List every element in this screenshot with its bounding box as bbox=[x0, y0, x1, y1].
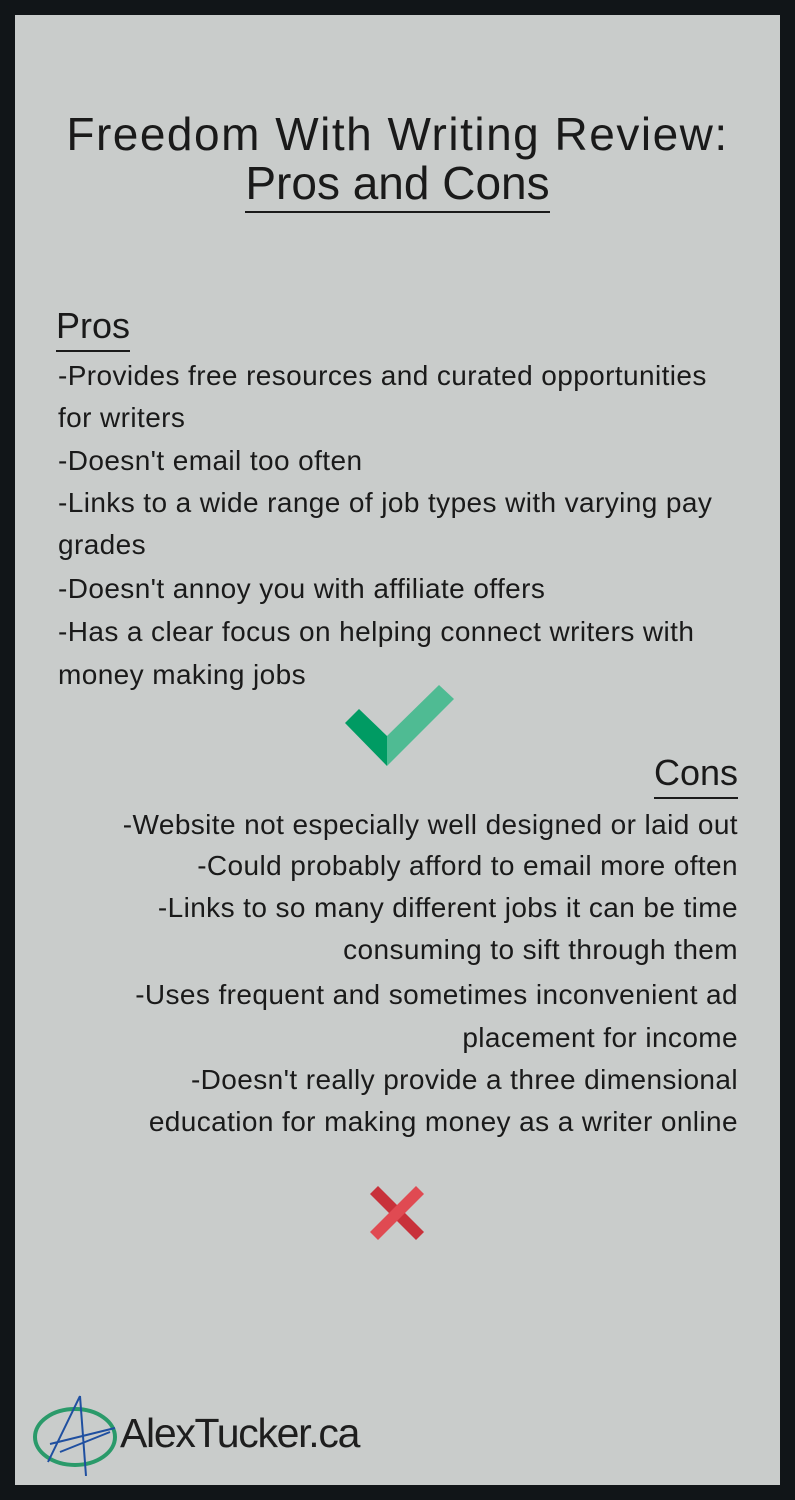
text block: cons list bbox=[123, 809, 738, 1137]
text block: pros list: money making jobs bbox=[58, 659, 306, 690]
text block: cons list: placement for income bbox=[462, 1022, 738, 1053]
text block: pros list: -Links to a wide range of job types with varying pay bbox=[58, 487, 712, 518]
text block: cons list: education for making money as a writer online bbox=[149, 1106, 738, 1137]
title: Freedom With Writing Review: bbox=[66, 108, 729, 160]
text block: pros list: grades bbox=[58, 529, 146, 560]
text block: cons list: -Doesn't really provide a three dimensional bbox=[191, 1064, 738, 1095]
text block: cons list: consuming to sift through them bbox=[343, 934, 738, 965]
text block: pros list: for writers bbox=[58, 402, 185, 433]
text block: pros list: -Has a clear focus on helping connect writers with bbox=[58, 616, 694, 647]
text block: cons list: -Website not especially well designed or laid out bbox=[123, 809, 738, 840]
text block: pros list: -Doesn't email too often bbox=[58, 445, 362, 476]
icon: cross bbox=[370, 1186, 424, 1240]
text block: pros list: -Doesn't annoy you with affiliate offers bbox=[58, 573, 545, 604]
icon: logo emblem bbox=[33, 1396, 117, 1476]
heading: Pros: Pros bbox=[56, 305, 130, 346]
text block: cons list: -Links to so many different jobs it can be time bbox=[158, 892, 738, 923]
logo bbox=[33, 1396, 360, 1476]
text block: cons list: -Uses frequent and sometimes inconvenient ad bbox=[135, 979, 738, 1010]
title: Pros and Cons bbox=[245, 157, 550, 209]
heading: Cons: Cons bbox=[654, 752, 738, 793]
text block: pros list: -Provides free resources and curated opportunities bbox=[58, 360, 707, 391]
title bbox=[66, 108, 729, 213]
text block: pros list bbox=[58, 360, 712, 690]
icon: checkmark bbox=[345, 685, 454, 766]
text block: cons list: -Could probably afford to email more often bbox=[197, 850, 738, 881]
text: logo name: AlexTucker.ca bbox=[120, 1410, 359, 1456]
